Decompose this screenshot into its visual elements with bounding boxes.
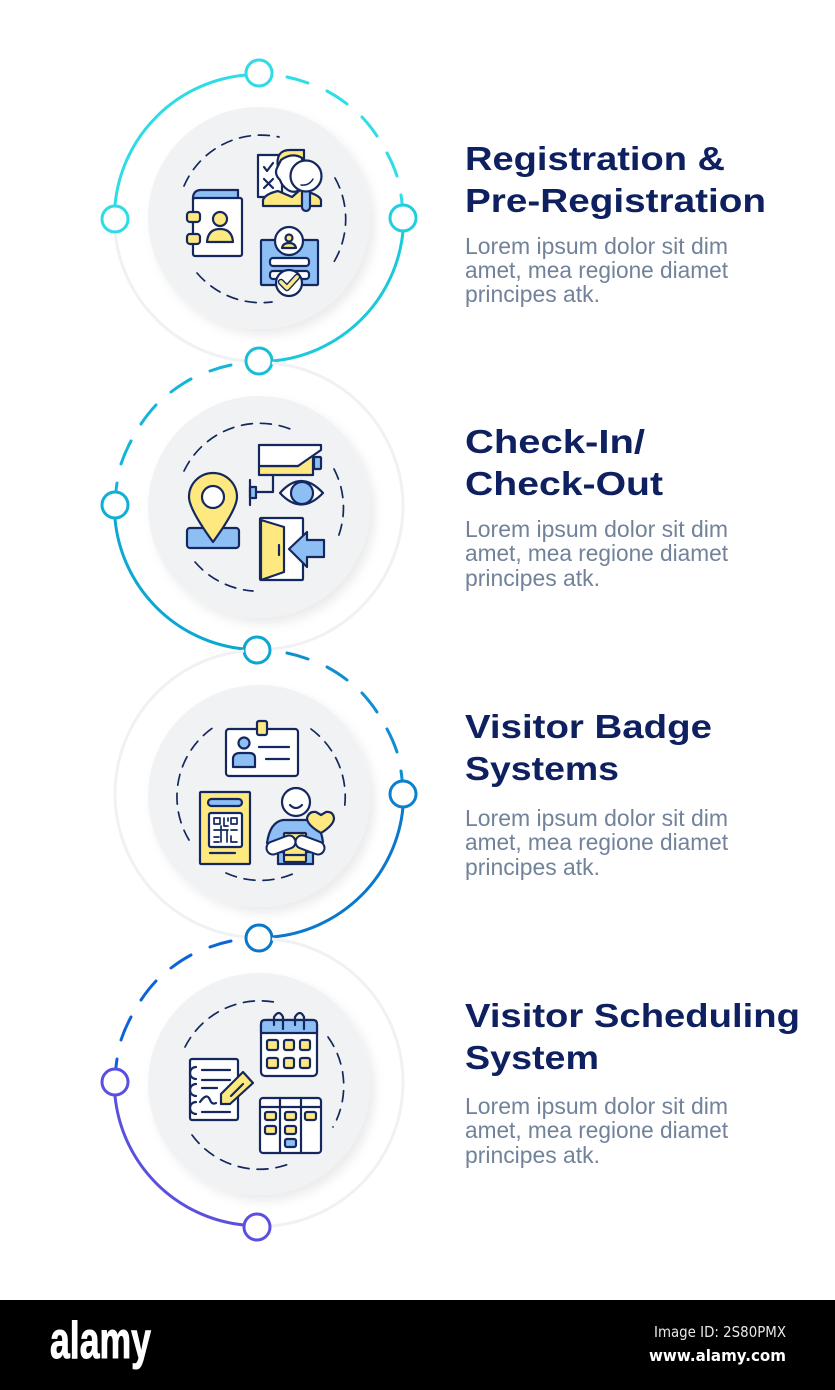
outer dashed arc 1 [287, 77, 402, 203]
icon: security camera [250, 445, 321, 505]
outer solid arc 2 [115, 519, 244, 649]
heading 4: Visitor Scheduling [465, 998, 800, 1035]
icon: calendar [261, 1013, 317, 1076]
text block 3: Lorem ipsum dolor sit dim [465, 805, 728, 831]
heading 3 [465, 709, 712, 788]
icon: verified profile card [261, 227, 318, 296]
footer bar [0, 1300, 835, 1390]
heading 1: Pre-Registration [465, 183, 766, 220]
text block 4: principes atk. [465, 1142, 600, 1168]
panel: visitor scheduling system [102, 939, 800, 1240]
panel: registration and pre-registration [102, 60, 766, 374]
heading 3: Visitor Badge [465, 709, 712, 746]
heading 1: Registration & [465, 141, 725, 178]
outer dashed arc 3 [287, 653, 402, 779]
heading 4: System [465, 1040, 599, 1077]
icon: location pin [187, 473, 239, 548]
image id: Image ID: 2S80PMX [654, 1323, 786, 1341]
icon: eye [280, 481, 323, 504]
outer solid arcs 1 [115, 75, 403, 361]
text block 4 [465, 1093, 729, 1168]
text block 1: principes atk. [465, 281, 600, 307]
website: www.alamy.com [649, 1346, 786, 1365]
outer dashed arc 2 [116, 365, 231, 491]
nodes 2 [102, 492, 270, 663]
text block 4: amet, mea regione diamet [465, 1117, 729, 1143]
text block 2: amet, mea regione diamet [465, 540, 729, 566]
panel: visitor badge systems [115, 651, 729, 951]
text block 3 [465, 805, 729, 880]
inner disc 4 [148, 973, 370, 1195]
outer dashed arc 4 [116, 941, 231, 1067]
heading 2: Check-Out [465, 466, 663, 503]
icon: door with arrow [260, 518, 324, 580]
footer logo: alamy [50, 1312, 151, 1370]
text block 2: principes atk. [465, 565, 600, 591]
heading 2: Check-In/ [465, 424, 645, 461]
dashed ring 3 [177, 727, 345, 880]
heading 3: Systems [465, 751, 619, 788]
text block 1 [465, 233, 729, 307]
icon: person with heart [267, 788, 334, 864]
dashed ring 1 [184, 135, 346, 303]
panel: check-in and check-out [102, 363, 729, 663]
nodes 3 [246, 781, 416, 951]
text block 2 [465, 516, 729, 591]
outer solid arc 3 [272, 807, 403, 937]
text block 3: principes atk. [465, 854, 600, 880]
text block 4: Lorem ipsum dolor sit dim [465, 1093, 728, 1119]
inner disc 3 [148, 685, 370, 907]
icon: contact notebook [187, 190, 242, 256]
icon: checklist and magnifier person [258, 150, 322, 211]
text block 2: Lorem ipsum dolor sit dim [465, 516, 728, 542]
dashed ring 4 [185, 1001, 344, 1169]
inner disc 1 [148, 107, 370, 329]
icon: qr code pass [200, 792, 250, 864]
heading 4 [465, 998, 800, 1077]
inner disc 2 [148, 396, 370, 618]
text block 3: amet, mea regione diamet [465, 829, 729, 855]
nodes 4 [102, 1069, 270, 1240]
nodes 1 [102, 60, 416, 374]
icon: notes with pencil [190, 1059, 253, 1120]
text block 1: Lorem ipsum dolor sit dim [465, 233, 728, 259]
icon: kanban board [260, 1098, 321, 1153]
heading 2 [465, 424, 663, 503]
heading 1 [465, 141, 766, 220]
dashed ring 2 [184, 423, 343, 591]
outer solid arc 4 [115, 1096, 244, 1225]
text block 1: amet, mea regione diamet [465, 257, 729, 283]
icon: id badge [226, 721, 298, 776]
